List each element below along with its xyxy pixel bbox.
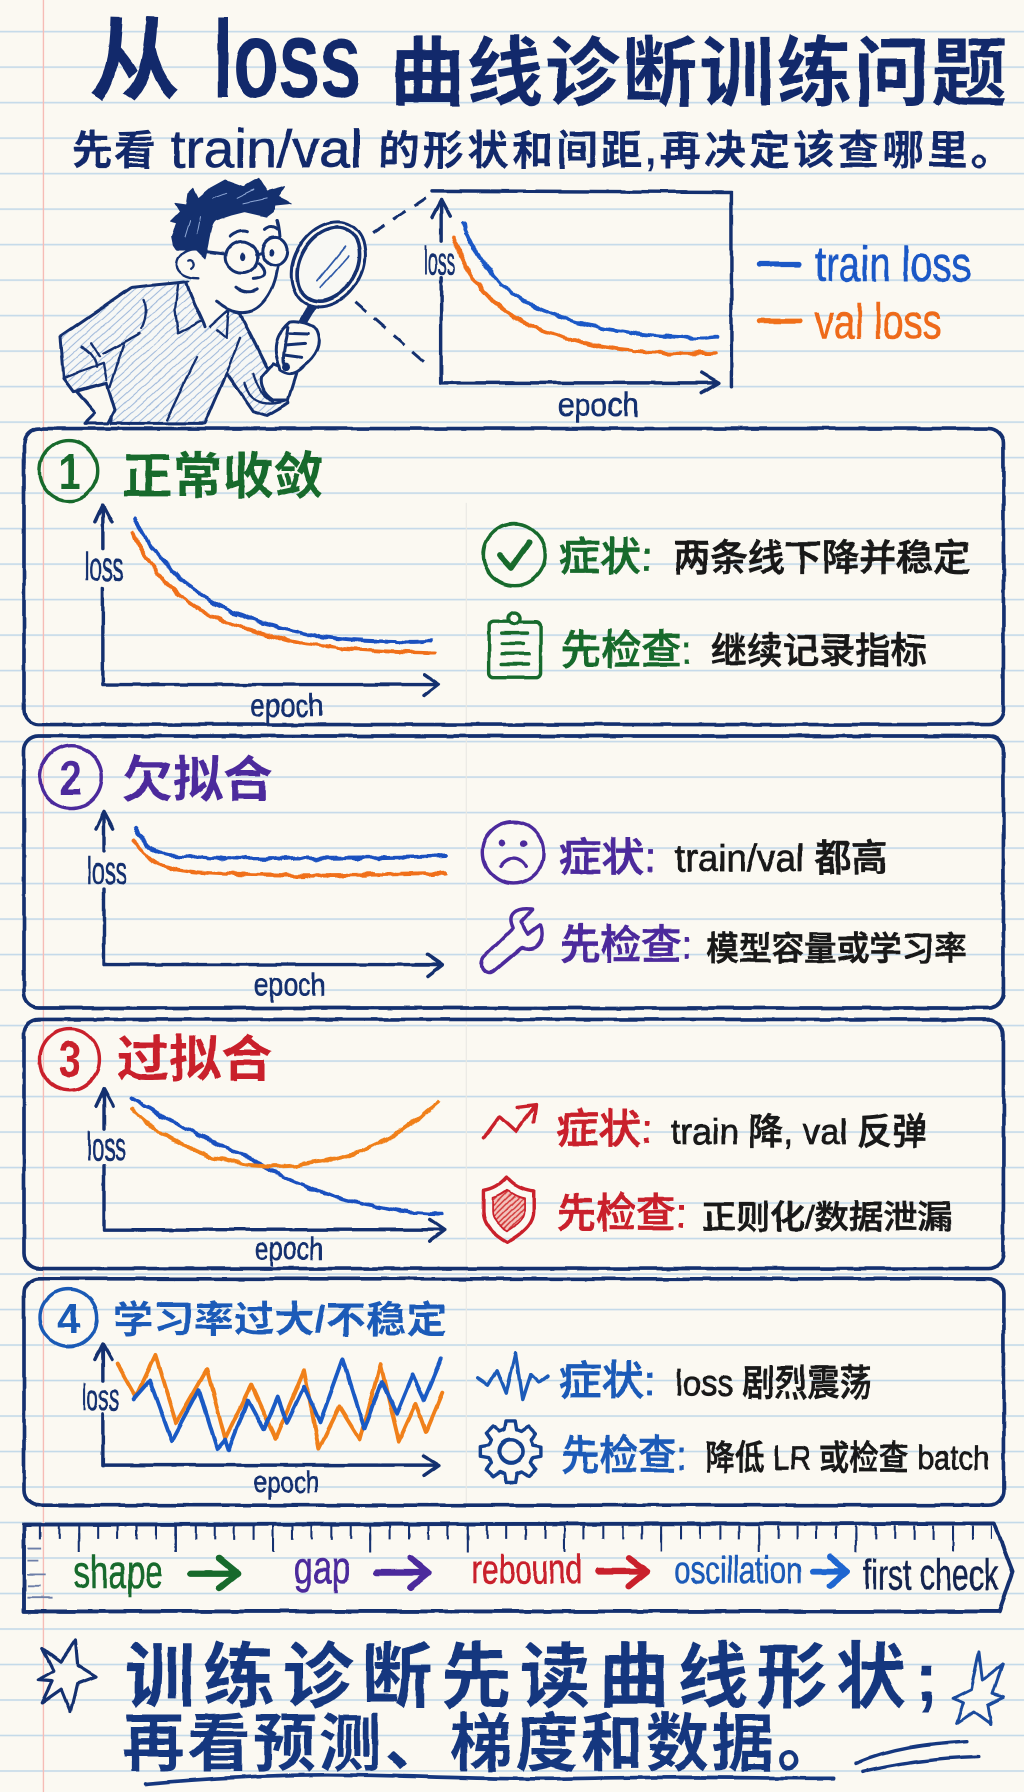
icon: right star [953,1651,1003,1725]
hero chart [424,191,731,424]
chart: epoch [250,688,323,724]
chart frame [432,191,731,386]
symptom text [559,1357,872,1403]
card frame [24,736,1003,1008]
footer takeaway [122,1639,938,1780]
check text: 先检查: [561,627,693,673]
eyes [240,253,245,261]
icon: pulse [478,1353,547,1400]
check text [560,922,967,968]
check text: 正则化/数据泄漏 [702,1200,952,1237]
card frame [24,1279,1003,1505]
icon: gear [480,1421,541,1482]
chart [82,1344,442,1500]
underline [145,1775,833,1784]
number badge [39,441,98,501]
magnifier [276,208,380,320]
heading: 学习率过大/不稳定 [113,1299,447,1341]
symptom text: 症状: [559,535,653,579]
symptom text [559,535,970,579]
swoosh strokes [856,1742,978,1771]
symptom text: loss 剧烈震荡 [675,1362,872,1403]
symptom text [557,1106,927,1152]
illustration: person with magnifier [60,178,380,423]
check text [557,1190,952,1237]
chart: loss [87,1126,126,1169]
subtitle [72,120,1013,179]
panel: 正常收敛 [24,429,1003,725]
icon: shield [483,1177,534,1242]
forearm [261,363,297,400]
number badge: 4 [57,1296,80,1343]
check text: 先检查: [560,922,693,968]
number badge [40,1289,97,1346]
hand [276,321,319,374]
icon: sad face [482,822,544,883]
step: shape: shape [73,1546,163,1597]
title: 从 [89,12,181,114]
icon: wrench [481,909,542,973]
number badge [40,746,102,809]
chart: epoch [254,1465,319,1500]
face [187,213,279,327]
chart [87,811,445,1002]
shirt details [63,283,288,420]
symptom text [559,836,888,880]
legend [759,238,971,349]
step: gap: gap [294,1542,351,1593]
panel: 学习率过大/不稳定 [24,1279,1003,1505]
shirt [60,282,288,423]
heading: 过拟合 [117,1031,273,1088]
chart: epoch [254,966,326,1002]
axis label: epoch: epoch [558,387,639,424]
axes [432,200,719,393]
title: 曲线诊断训练问题 [390,31,1007,115]
card frame [24,1019,1003,1269]
ruler outline [24,1523,1013,1611]
panel: 欠拟合 [24,736,1003,1008]
icon: left star [38,1640,96,1712]
ear [177,249,205,278]
ruler [24,1523,1013,1611]
title: loss [213,0,361,121]
subtitle: train/val [170,120,362,179]
check text: 模型容量或学习率 [706,931,967,968]
check text [561,1433,990,1479]
symptom text: 两条线下降并稳定 [673,536,970,578]
icon: check circle [483,524,545,586]
glasses [226,242,258,273]
check text: 先检查: [561,1433,687,1479]
heading: 欠拟合 [122,754,273,808]
icon: clipboard [489,613,541,678]
chart: loss [82,1376,119,1418]
symptom text: 症状: [559,836,656,880]
brows, nose, smile [229,226,278,292]
chart [87,1089,445,1266]
icon: rising trend [483,1105,536,1138]
footer takeaway: 再看预测、梯度和数据。 [122,1710,840,1780]
title [89,0,1007,121]
hair [170,178,292,258]
symptom text: 症状: [559,1357,656,1403]
step: gap [294,1542,429,1593]
panel: 过拟合 [24,1019,1003,1269]
number badge: 2 [59,752,82,805]
chart: loss [85,544,123,590]
check text: 先检查: [557,1190,687,1236]
chart: epoch [255,1230,323,1266]
legend: train loss: train loss [815,238,971,292]
left arm [77,383,115,423]
check text: 继续记录指标 [711,630,927,671]
hero chart: loss [424,240,455,283]
number badge [40,1029,99,1090]
check text [561,627,927,673]
val curve [454,237,715,354]
dashed zoom lines [355,198,429,366]
chart [85,505,439,724]
heading: 正常收敛 [122,448,323,505]
chart: loss [87,849,127,891]
subtitle: 的形状和间距,再决定该查哪里。 [378,128,1013,174]
magnifier handle [302,307,312,323]
subtitle: 先看 [72,128,155,174]
check text: 降低 LR 或检查 batch [705,1440,990,1478]
train curve [463,223,715,338]
number badge: 3 [58,1031,81,1088]
symptom text: train 降, val 反弹 [671,1111,927,1152]
step: rebound: rebound [472,1546,582,1592]
legend: val loss: val loss [815,295,942,349]
symptom text: train/val 都高 [675,837,888,879]
symptom text: 症状: [557,1106,653,1152]
footer takeaway: 训练诊断先读曲线形状; [125,1639,938,1718]
step: oscillation: oscillation [674,1549,802,1591]
card frame [24,429,1003,725]
number badge: 1 [58,443,81,500]
